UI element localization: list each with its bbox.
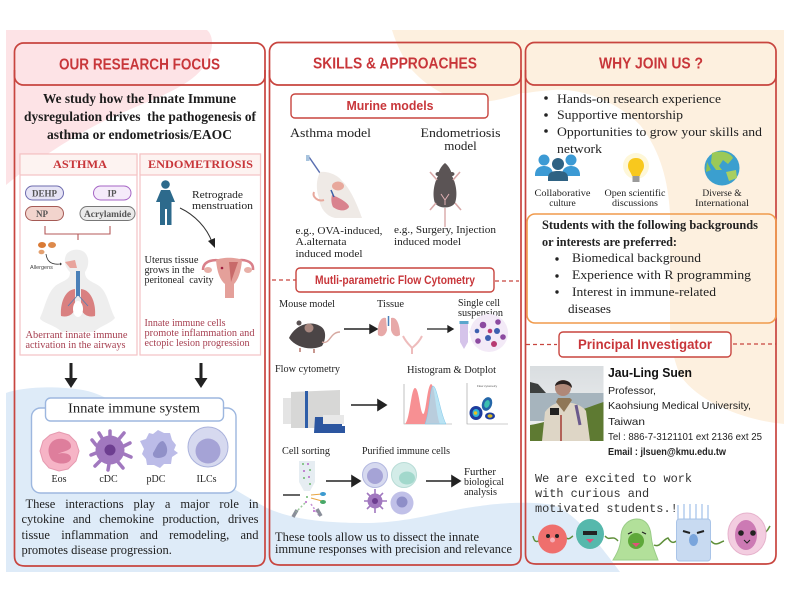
uterus description: grows in the — [144, 265, 195, 276]
character: teal cell — [576, 519, 604, 549]
workflow row: flow cytometry: Flow cytometry — [275, 364, 341, 375]
preferred backgrounds box: Experience with R programming — [572, 267, 752, 282]
panel frame — [270, 70, 521, 565]
endometriosis model column — [394, 125, 500, 248]
preferred backgrounds box: or interests are preferred: — [542, 235, 677, 249]
asthma outcome text — [26, 330, 128, 351]
workflow row: cell sorting: biological — [464, 477, 504, 488]
sub-panel: endometriosis — [140, 154, 260, 355]
arrow: endometriosis to immune system — [194, 363, 208, 388]
sub-panel: asthma: ASTHMA — [53, 159, 108, 171]
closing paragraph — [22, 496, 258, 562]
endometriosis outcome text — [144, 318, 255, 349]
arrow — [351, 400, 386, 410]
workflow row: flow cytometry: Histogram & Dotplot — [407, 365, 496, 376]
cell: Eos: Eos — [52, 474, 67, 485]
workflow row: mouse to single cells: suspension — [458, 308, 504, 319]
icon: uterus — [203, 258, 253, 298]
summary text: immune responses with precision and relevance — [275, 542, 512, 556]
panel frame — [526, 70, 776, 564]
icon: open scientific discussions: discussions — [612, 199, 658, 209]
workflow row: mouse to single cells: Mouse model — [279, 299, 335, 310]
principal investigator label: Principal Investigator — [578, 337, 713, 352]
cell: cDC: cDC — [99, 474, 118, 485]
workflow row: flow cytometry — [275, 364, 508, 433]
icon: person — [156, 180, 175, 225]
investigator details: Taiwan — [608, 416, 645, 428]
asthma model column: A.alternata — [296, 236, 347, 248]
exposure pills: IP — [108, 188, 117, 198]
invitation message: We are excited to work — [535, 472, 692, 486]
cell: ILCs — [188, 427, 228, 485]
icon: human airway and lungs — [40, 250, 115, 332]
character: pink cell — [728, 513, 766, 555]
icon: diverse and international globe: Diverse & — [702, 189, 742, 199]
icon: white mouse with lungs — [306, 155, 362, 218]
endometriosis outcome text: Innate immune cells — [144, 318, 226, 329]
panel: skills and approaches — [270, 42, 521, 565]
character: green cell — [613, 519, 658, 560]
workflow row: cell sorting: analysis — [464, 487, 497, 498]
panel heading — [270, 42, 521, 85]
label: Innate immune system — [68, 400, 201, 416]
workflow row: mouse to single cells: Single cell — [458, 298, 500, 309]
closing paragraph: These interactions play a major role in — [26, 496, 258, 510]
icon: diverse and international globe — [695, 150, 749, 209]
invitation message: with curious and — [535, 487, 649, 501]
exposure pills: DEHP — [32, 188, 57, 198]
cell: Eos — [40, 432, 79, 485]
workflow row: mouse to single cells: Tissue — [377, 299, 404, 310]
retrograde label: menstruation — [192, 200, 254, 212]
asthma model column — [290, 125, 383, 260]
panel heading — [526, 42, 776, 85]
cell: pDC — [140, 430, 178, 485]
bracket connector — [45, 226, 110, 240]
arrow — [427, 326, 453, 332]
workflow row: cell sorting: Purified immune cells — [362, 446, 450, 457]
benefits list: Opportunities to grow your skills and — [557, 124, 763, 139]
arrow — [426, 476, 460, 486]
investigator details: Email : jlsuen@kmu.edu.tw — [608, 447, 726, 458]
arrow: asthma to immune system — [64, 363, 78, 388]
panel frame — [14, 70, 265, 566]
panel heading: WHY JOIN US ? — [599, 56, 703, 72]
endometriosis outcome text: ectopic lesion progression — [144, 338, 250, 349]
icon: open scientific discussions — [604, 153, 666, 209]
benefits list: network — [557, 141, 603, 156]
benefits list — [544, 91, 763, 156]
endometriosis model column: model — [444, 138, 477, 153]
research statement — [24, 91, 256, 142]
arrow — [344, 325, 377, 333]
closing paragraph: cytokine and chemokine production, drives — [22, 512, 258, 526]
cell: ILCs: ILCs — [196, 474, 217, 485]
exposure pills: Acrylamide — [84, 209, 131, 219]
histogram chart — [404, 384, 452, 424]
asthma outcome text: Aberrant innate immune — [26, 330, 128, 341]
allergens — [30, 242, 62, 271]
panel heading: OUR RESEARCH FOCUS — [59, 56, 220, 74]
dotplot chart: Flow cytometry — [477, 384, 498, 388]
character: red cell — [538, 524, 567, 554]
icon: purified immune cells — [362, 462, 416, 514]
summary text: These tools allow us to dissect the innate — [275, 530, 479, 544]
workflow row: cell sorting: Further — [464, 467, 497, 478]
icon: collaborative culture: culture — [549, 199, 576, 209]
cartoon cell characters — [533, 504, 770, 561]
panel heading: SKILLS & APPROACHES — [313, 56, 477, 72]
asthma model column: e.g., OVA-induced, — [296, 225, 383, 237]
summary text — [275, 530, 512, 556]
asthma outcome text: activation in the airways — [26, 340, 126, 351]
investigator details: Tel : 886-7-3121101 ext 2136 ext 25 — [608, 432, 762, 443]
flow cytometry label — [272, 268, 519, 292]
research statement: dysregulation drives the pathogenesis of — [24, 109, 256, 124]
uterus description — [144, 255, 214, 286]
icon: collaborative culture: Collaborative — [534, 189, 590, 199]
icon: tube and single cell suspension — [460, 314, 508, 352]
photo: principal investigator — [530, 366, 604, 441]
research statement: asthma or endometriosis/EAOC — [47, 127, 232, 142]
endometriosis outcome text: promote inflammation and — [144, 328, 255, 339]
curved arrow — [180, 208, 215, 248]
closing paragraph: promotes disease progression. — [22, 543, 172, 557]
preferred backgrounds box: diseases — [568, 301, 611, 316]
workflow row: mouse to single cells — [279, 298, 508, 354]
retrograde label — [192, 189, 254, 212]
arrow — [326, 476, 360, 486]
endometriosis model column: induced model — [394, 236, 461, 248]
icon: lungs and uterus tissue — [378, 316, 422, 354]
invitation message: motivated students.! — [535, 502, 678, 516]
murine models label — [291, 94, 488, 118]
cell: cDC — [91, 431, 131, 485]
innate immune system box — [32, 398, 236, 493]
character: ciliated blue cell — [676, 504, 710, 561]
endometriosis model column: e.g., Surgery, Injection — [394, 224, 496, 236]
murine models label: Murine models — [346, 99, 434, 113]
investigator details: Professor, — [608, 385, 656, 397]
asthma model column: Asthma model — [290, 125, 371, 140]
icon: black mouse — [289, 320, 340, 353]
uterus description: peritoneal cavity — [144, 275, 214, 286]
investigator details — [608, 365, 762, 458]
icon: open scientific discussions: Open scientific — [604, 188, 666, 199]
closing paragraph: tissue inflammation and remodeling, and — [22, 528, 258, 542]
asthma model column: induced model — [296, 248, 362, 260]
workflow row: cell sorting — [282, 446, 504, 517]
character arms — [533, 526, 770, 546]
benefits list: Supportive mentorship — [557, 107, 683, 122]
preferred backgrounds box: Students with the following backgrounds — [542, 218, 758, 232]
endometriosis model column: Endometriosis — [420, 125, 500, 140]
dotplot chart — [467, 383, 508, 424]
principal investigator label — [526, 332, 776, 357]
investigator details: Kaohsiung Medical University, — [608, 400, 751, 412]
uterus description: Uterus tissue — [144, 255, 199, 266]
sub-panel: endometriosis: ENDOMETRIOSIS — [148, 159, 253, 171]
workflow row: cell sorting: Cell sorting — [282, 446, 331, 457]
cell: pDC: pDC — [147, 474, 166, 485]
panel heading — [14, 43, 265, 85]
icon: cell sorter — [283, 461, 326, 517]
retrograde label: Retrograde — [192, 189, 243, 201]
preferred backgrounds box: Interest in immune-related — [572, 284, 717, 299]
panel: why join us — [526, 42, 776, 564]
exposure pills: NP — [36, 209, 48, 219]
preferred backgrounds box: Biomedical background — [572, 250, 702, 265]
exposure pills — [26, 186, 135, 220]
panel: our research focus — [14, 43, 265, 566]
sub-panel: asthma — [20, 154, 137, 355]
preferred backgrounds box — [527, 214, 776, 323]
label — [46, 398, 224, 421]
icon: diverse and international globe: International — [695, 199, 749, 209]
icon: dark mouse — [430, 163, 461, 227]
research statement: We study how the Innate Immune — [43, 91, 236, 106]
icon: collaborative culture — [534, 154, 590, 209]
icon: cytometer machine — [283, 390, 345, 433]
investigator details: Jau-Ling Suen — [608, 365, 692, 380]
flow cytometry label: Mutli-parametric Flow Cytometry — [315, 275, 476, 287]
invitation message — [535, 472, 692, 516]
benefits list: Hands-on research experience — [557, 91, 721, 106]
allergens: Allergens — [30, 265, 53, 271]
